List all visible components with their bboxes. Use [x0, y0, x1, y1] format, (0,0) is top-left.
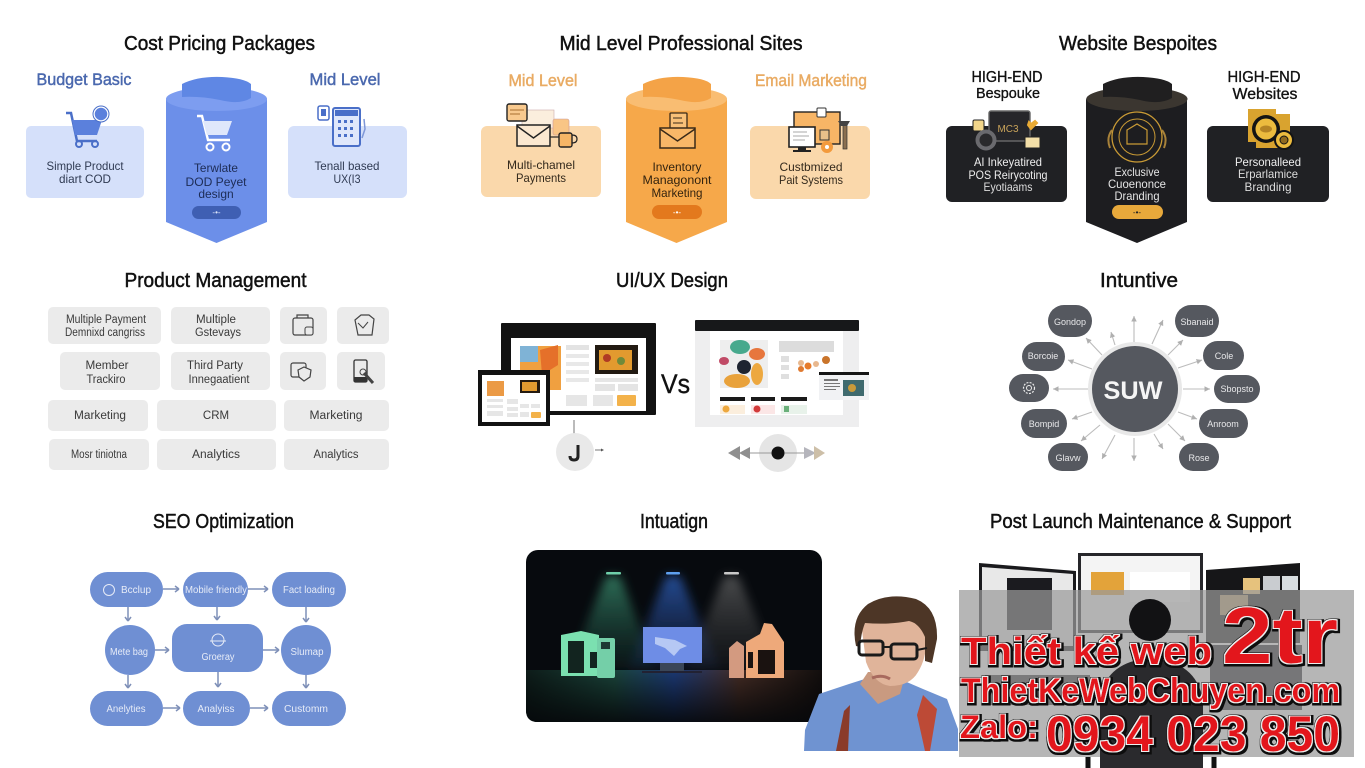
subheading: high-end websites: [1228, 69, 1300, 103]
subheading: high-end bespouke: [972, 69, 1042, 102]
right monitor: [1206, 563, 1300, 643]
subheading: high-end bespouke: HIGH-END: [972, 69, 1042, 86]
heading: mid level professional sites: Mid Level Professional Sites: [560, 32, 802, 55]
subheading: high-end bespouke: Bespouke: [976, 85, 1040, 102]
centre hub: [1088, 342, 1182, 436]
icon: gold emblem: [1248, 109, 1293, 149]
label: vs: Vs: [661, 369, 690, 399]
panel: radial diagram: [1009, 269, 1260, 471]
node: mobile friendly: [183, 572, 248, 607]
tile: analytics right: Analytics: [314, 449, 359, 461]
tile: multiple payment: Demnixd cangriss: [65, 327, 145, 339]
tile: multiple gateways: Gstevays: [195, 327, 241, 339]
tile: crm: CRM: [203, 410, 229, 422]
card: multi-channel payments: Multi-chamel: [507, 158, 575, 172]
text: website url: ThietKeWebChuyen.com: [961, 672, 1340, 710]
icon: right dial with arrows: [728, 434, 825, 472]
heading: intuatign: Intuatign: [640, 510, 708, 533]
tile: third party integration: Innegaatient: [188, 374, 250, 386]
icon: green glowing device: [561, 631, 615, 678]
tile: multiple gateways: Multiple: [196, 314, 236, 326]
node: fast loading: Fact loading: [283, 585, 335, 596]
node: rose: [1179, 443, 1219, 471]
node: rose: Rose: [1188, 453, 1210, 463]
icon: pos devices: MC3: [997, 124, 1019, 135]
mockup: floating window: [819, 372, 869, 400]
icon: pos devices: [973, 111, 1040, 148]
radial arrows: [1053, 316, 1210, 461]
card: personalized experience: Erparlamice: [1238, 167, 1298, 181]
node: cole: Cole: [1215, 351, 1233, 361]
card: personalized experience: Branding: [1244, 180, 1292, 194]
tile: multiple gateways: [171, 307, 270, 344]
heading: intuntive: Intuntive: [1100, 269, 1178, 292]
tile: most options: Mosr tiniotna: [71, 449, 128, 461]
node: mobile friendly: Mobile friendly: [185, 585, 247, 596]
node: bomplid: Bompid: [1029, 419, 1059, 429]
node: sbanaid: [1175, 305, 1219, 337]
barrel: exclusive branding: Exclusive: [1114, 165, 1160, 179]
barrel: inventory management marketing: -•-: [673, 208, 681, 217]
icon: cart: [66, 106, 109, 147]
card: customized systems: [750, 126, 870, 199]
mockup: tablet window: [478, 370, 550, 426]
tile: marketing right: Marketing: [310, 410, 362, 422]
card: customized systems: Custbmized: [780, 160, 842, 174]
node: fast loading: [272, 572, 346, 607]
subheading: mid level: Mid Level: [508, 71, 578, 90]
text: phone number: 0934 023 850: [1046, 706, 1340, 762]
card: multi-channel payments: Payments: [516, 171, 566, 185]
tile: member tracking: [60, 352, 160, 390]
tile: marketing: Marketing: [74, 410, 126, 422]
panel: seo optimization: [90, 510, 346, 726]
barrel: exclusive branding: [1086, 77, 1188, 243]
person at desk: [1088, 599, 1214, 768]
tile icon: phone touch: [337, 352, 385, 390]
tile: member tracking: Trackiro: [86, 374, 126, 386]
tile icon: shield: [280, 352, 326, 390]
tile: multiple payment: Multiple Payment: [66, 314, 147, 326]
subheading: high-end websites: HIGH-END: [1228, 69, 1300, 86]
node: gondop: Gondop: [1054, 317, 1086, 327]
barrel: template design: Terwlate: [194, 161, 238, 175]
node: analysis: Analyiss: [198, 704, 234, 715]
grey banner background: [959, 590, 1354, 757]
card: mid level: Tenall based: [314, 159, 380, 173]
card: ai integrated pos: Eyotiaams: [984, 180, 1032, 194]
tile: analytics: Analytics: [192, 449, 240, 461]
node: anroom: Anroom: [1207, 419, 1239, 429]
node: sbopsto: [1214, 375, 1260, 403]
text: zalo label: Zalo:: [960, 709, 1038, 745]
card: customized systems: Pait Systems: [779, 173, 843, 187]
tile: multiple payment: [48, 307, 161, 344]
icon: orange glowing device: [729, 623, 784, 678]
node: custom: Customm: [284, 704, 328, 715]
heading: post launch maintenance and support: Post Launch Maintenance & Support: [990, 510, 1291, 533]
subheading: mid level: Mid Level: [310, 70, 380, 89]
card: budget basic: diart COD: [59, 172, 111, 186]
node: glavw: [1048, 443, 1088, 471]
lower desk screens: [985, 645, 1302, 710]
card: ai integrated pos: POS Reirycoting: [968, 168, 1048, 182]
node: centre: [172, 624, 263, 672]
card: budget basic: [26, 126, 144, 198]
tile: crm: [157, 400, 276, 431]
node: analytics: Anelyties: [106, 704, 146, 715]
barrel: template design: -•-: [212, 208, 221, 217]
node: cole: [1203, 341, 1244, 370]
panel: mid level professional sites: [481, 32, 870, 243]
node: sbanaid: Sbanaid: [1180, 317, 1214, 327]
node: borcoie: Borcoie: [1028, 351, 1058, 361]
mockup: desktop window: [501, 323, 656, 415]
photo: monitors and desk: [959, 510, 1354, 768]
text: thiet ke web: Thiết kế web: [961, 631, 1212, 673]
barrel: exclusive branding: Cuoenonce: [1108, 177, 1166, 191]
icon: envelope group: [507, 104, 577, 147]
left monitor: [979, 563, 1076, 651]
card: ai integrated pos: [946, 126, 1067, 202]
mockup: light window: [695, 320, 859, 427]
barrel: template design: DOD Peyet: [186, 175, 247, 189]
subheading: email marketing: Email Marketing: [755, 71, 867, 90]
barrel: inventory management marketing: Managonont: [642, 173, 712, 187]
tile: third party integration: [171, 352, 270, 390]
barrel: template design: design: [198, 187, 234, 201]
panel: ui/ux design: [478, 269, 869, 472]
card: multi-channel payments: [481, 126, 601, 197]
barrel: inventory management marketing: Marketing: [652, 186, 702, 200]
node: bomplid: [1021, 409, 1067, 438]
tile icon: briefcase: [280, 307, 327, 344]
node: gondop: [1048, 305, 1092, 337]
tile: marketing: [48, 400, 148, 431]
node: meta tags: [105, 625, 155, 675]
node: meta tags: Mete bag: [110, 647, 148, 658]
centre monitor: [1078, 553, 1203, 633]
node: glavw: Glavw: [1055, 453, 1081, 463]
heading: product management: Product Management: [124, 269, 307, 292]
card: personalized experience: [1207, 126, 1329, 202]
card: ai integrated pos: AI Inkeyatired: [974, 155, 1042, 169]
tile: member tracking: Member: [86, 360, 129, 372]
subheading: high-end websites: Websites: [1232, 86, 1298, 103]
node: sitemap: [281, 625, 331, 675]
centre hub: SUW: [1104, 377, 1163, 405]
card: personalized experience: Personalleed: [1235, 155, 1301, 169]
heading: ui/ux design: UI/UX Design: [616, 269, 728, 292]
node: analysis: [183, 691, 250, 726]
icon: glowing monitor: [642, 627, 702, 673]
panel: website bespoke: [946, 32, 1329, 243]
card: budget basic: Simple Product: [46, 159, 124, 173]
tile icon: bag: [337, 307, 389, 344]
heading: seo optimization: SEO Optimization: [153, 510, 294, 533]
icon: computer and tools: [789, 108, 850, 153]
heading: cost pricing packages: Cost Pricing Packages: [124, 32, 315, 55]
tile: analytics: [157, 439, 276, 470]
panel: cost pricing packages: [26, 32, 407, 243]
icon: calculator: [318, 106, 365, 146]
node: sitemap: Slumap: [290, 647, 324, 658]
barrel: inventory management marketing: Inventory: [652, 160, 702, 174]
heading: website bespoites: Website Bespoites: [1059, 32, 1217, 55]
node: borcoie: [1022, 342, 1065, 371]
stage scene: [526, 550, 822, 722]
node: centre: Groeray: [202, 652, 234, 663]
panel: spotlight stage: [526, 510, 822, 722]
node: sbopsto: Sbopsto: [1220, 384, 1254, 394]
icon: left dial with arrow: [556, 420, 604, 471]
node: gear: [1009, 374, 1049, 402]
card: mid level: UX(I3: [334, 172, 361, 186]
panel: product management: [48, 269, 389, 470]
tile: most options: [49, 439, 149, 470]
flow arrows: [125, 586, 309, 711]
barrel: inventory management marketing: [626, 77, 727, 243]
node: anroom: [1199, 409, 1248, 438]
node: backup: Bcclup: [121, 585, 151, 596]
tile: third party integration: Third Party: [187, 360, 243, 372]
tile: marketing right: [284, 400, 389, 431]
node: analytics: [90, 691, 163, 726]
node: custom: [272, 691, 346, 726]
barrel: template design: [166, 77, 267, 243]
node: backup: [90, 572, 163, 607]
portrait: man with glasses: [804, 596, 958, 751]
text: 2tr: 2tr: [1222, 591, 1338, 680]
subheading: budget basic: Budget Basic: [36, 70, 132, 89]
tile: analytics right: [284, 439, 389, 470]
barrel: exclusive branding: -•-: [1133, 208, 1141, 217]
barrel: exclusive branding: Dranding: [1114, 189, 1160, 203]
card: mid level: [288, 126, 407, 198]
